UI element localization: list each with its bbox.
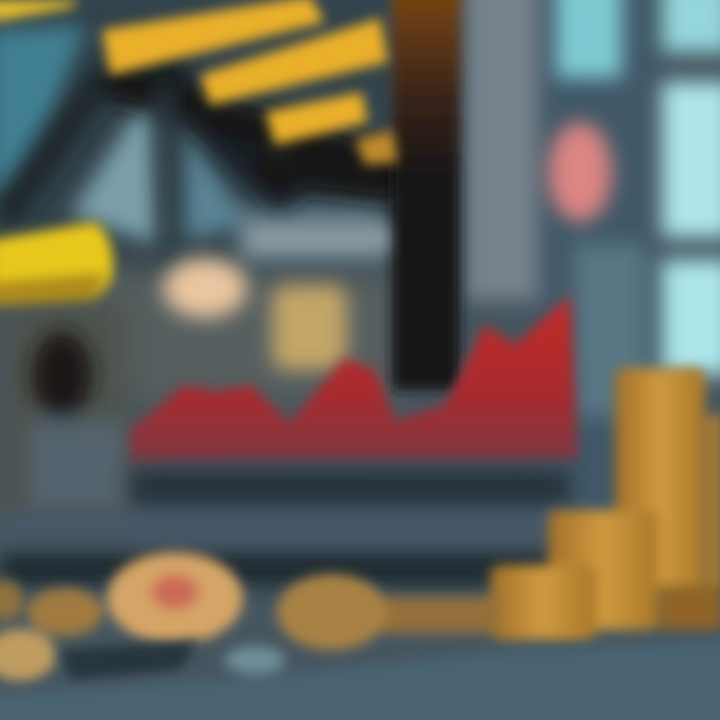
coin centre [277, 574, 387, 650]
panel: upper background [0, 0, 400, 540]
tall coin stack [615, 368, 705, 590]
area chart: red line [130, 295, 578, 462]
medium coin stack [548, 510, 658, 630]
panel: right light windows [556, 0, 720, 375]
panel: roof shapes [70, 90, 435, 265]
yellow awning [0, 222, 113, 306]
panel: dark central column [392, 0, 460, 390]
panel: gray column [465, 0, 665, 520]
yellow bar: lower [265, 92, 368, 145]
big coin with red mark [107, 552, 243, 644]
dark diagonal beams [10, 60, 390, 260]
table edge [0, 640, 720, 720]
yellow bar: small [355, 130, 398, 165]
yellow bar: middle [200, 18, 388, 105]
coin stack centre right [490, 565, 595, 640]
coin stack edge [708, 415, 720, 590]
coins low [375, 597, 500, 633]
panel: teal window left [0, 25, 85, 200]
shop sign blob [30, 258, 347, 510]
yellow bar: upper [102, 0, 325, 75]
yellow bar: far left [0, 0, 80, 22]
chart base stripes [0, 470, 570, 586]
coin far left [0, 629, 56, 681]
low coin stack [660, 585, 720, 630]
coin stacks right [548, 368, 720, 630]
coin left [27, 588, 103, 636]
icon: pink flag [548, 122, 612, 222]
top yellow bars [0, 0, 398, 165]
bottom coins [0, 552, 595, 681]
